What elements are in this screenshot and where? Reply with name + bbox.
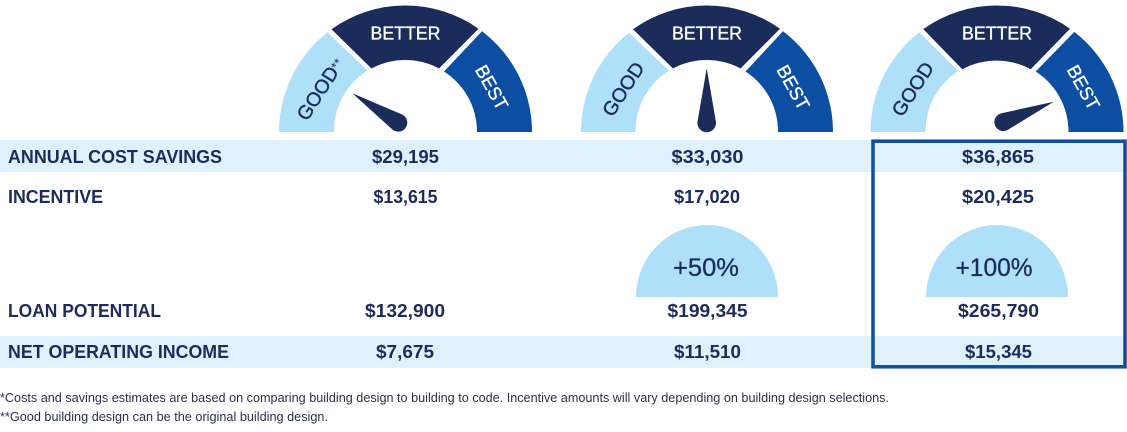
segment: best — [444, 31, 532, 132]
needle — [992, 93, 1057, 134]
values: column 1: $29,195 — [372, 147, 439, 167]
row label: loan potential: LOAN POTENTIAL — [8, 301, 161, 321]
segment: better — [332, 5, 478, 68]
segment: good — [279, 32, 368, 132]
gauge: column 1 — [279, 5, 532, 135]
label: better: BETTER — [370, 22, 440, 44]
row label: net operating income: NET OPERATING INCOME — [8, 342, 229, 362]
segment: better — [633, 5, 780, 68]
label: good: ** — [328, 56, 346, 73]
values: column 3: $36,865 — [962, 147, 1034, 167]
label: best: BEST — [471, 61, 513, 113]
segment: best — [746, 31, 833, 132]
values: column 1 — [365, 147, 445, 362]
segment: good — [581, 33, 669, 132]
highlight box: column 3 — [873, 141, 1125, 367]
label: best: BEST — [1063, 61, 1104, 113]
needle — [347, 86, 411, 135]
label: better: BETTER — [672, 22, 742, 44]
footnote 2: **Good building design can be the original building design. — [0, 410, 328, 424]
label: good: GOOD — [888, 58, 939, 121]
dome: +50%: +50% — [673, 254, 739, 282]
values: column 2: $199,345 — [668, 301, 748, 321]
dome: +100% — [926, 225, 1068, 297]
footnote 1: *Costs and savings estimates are based on comparing building design to building to code. Incentive amounts will vary depending on building design selections. — [0, 391, 889, 405]
values: column 2: $33,030 — [672, 147, 744, 167]
segment: better — [923, 5, 1070, 69]
gauge: column 2 — [581, 5, 833, 132]
values: column 3: $265,790 — [958, 301, 1039, 321]
values: column 1: $13,615 — [374, 187, 438, 207]
row label: annual cost savings: ANNUAL COST SAVINGS — [8, 147, 222, 167]
segment: good — [870, 32, 958, 132]
gauge: column 3 — [870, 5, 1124, 134]
label: better: BETTER — [962, 22, 1032, 44]
dome: +50% — [636, 225, 778, 297]
values: column 2: $11,510 — [674, 342, 741, 362]
values: column 2 — [668, 147, 748, 362]
row label: incentive: INCENTIVE — [8, 187, 103, 207]
values: column 3: $15,345 — [965, 342, 1032, 362]
values: column 3 — [958, 147, 1039, 362]
label: good: GOOD — [293, 63, 344, 125]
dome: +100%: +100% — [956, 254, 1032, 282]
label: best: BEST — [773, 61, 814, 113]
needle — [697, 68, 716, 132]
band: net operating income row — [0, 336, 1127, 368]
values: column 1: $132,900 — [365, 301, 445, 321]
band: annual cost savings row — [0, 140, 1127, 172]
values: column 2: $17,020 — [674, 187, 740, 207]
segment: best — [1036, 32, 1124, 132]
values: column 1: $7,675 — [376, 342, 434, 362]
values: column 3: $20,425 — [962, 187, 1034, 207]
label: good: GOOD — [598, 58, 649, 121]
